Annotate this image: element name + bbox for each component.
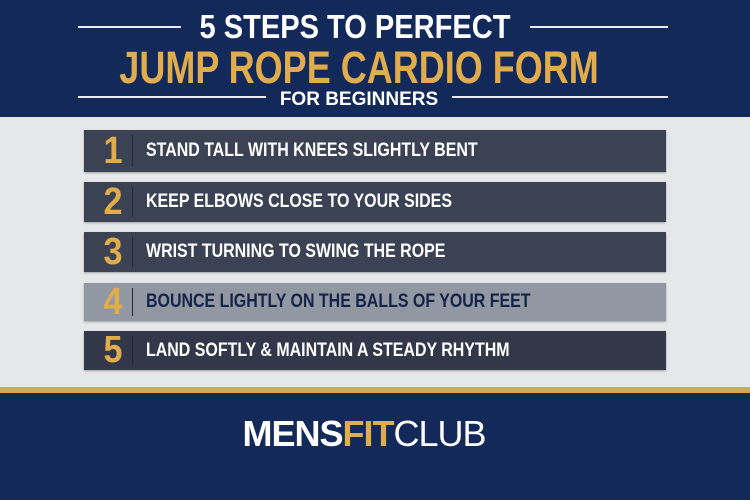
step 5 — [84, 331, 666, 370]
subtitle: FOR BEGINNERS — [280, 89, 438, 110]
step 5: LAND SOFTLY & MAINTAIN A STEADY RHYTHM — [146, 340, 510, 361]
step 2: KEEP ELBOWS CLOSE TO YOUR SIDES — [146, 191, 452, 212]
gold line — [0, 387, 750, 393]
step 1: 1 — [103, 130, 123, 172]
step 2 — [84, 182, 666, 222]
step 2: 2 — [103, 181, 123, 223]
step 1 — [84, 130, 666, 172]
step 5: 5 — [103, 329, 123, 371]
step 3: 3 — [103, 231, 123, 273]
logo: MENSFITCLUB — [242, 413, 486, 454]
header — [0, 0, 750, 117]
step 4: 4 — [103, 281, 123, 323]
footer — [0, 393, 750, 500]
step 4 — [84, 283, 666, 321]
step 3 — [84, 232, 666, 272]
step 1: STAND TALL WITH KNEES SLIGHTLY BENT — [146, 140, 478, 161]
title line 1: 5 STEPS TO PERFECT — [200, 8, 510, 45]
title line 2: JUMP ROPE CARDIO FORM — [119, 42, 599, 93]
step 4: BOUNCE LIGHTLY ON THE BALLS OF YOUR FEET — [146, 291, 531, 312]
step 3: WRIST TURNING TO SWING THE ROPE — [146, 241, 445, 262]
